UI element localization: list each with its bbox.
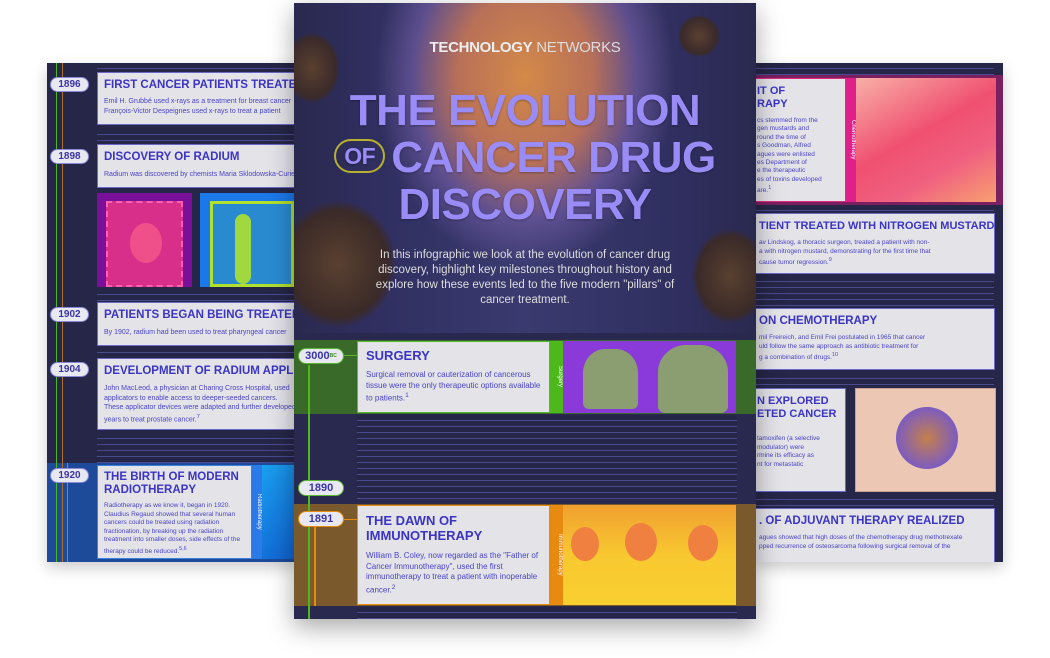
title: OF <box>344 143 375 169</box>
card: adjuvant therapy: agues showed that high doses of the chemotherapy drug methotrexate <box>759 534 962 541</box>
card: birth of chemotherapy: cs stemmed from the <box>757 117 818 124</box>
image: coley photo <box>563 505 736 605</box>
title: THE EVOLUTION <box>350 86 700 135</box>
band: immunotherapy: Immunotherapy <box>557 534 563 576</box>
card: birth of modern radiotherapy <box>97 465 252 559</box>
card: birth of chemotherapy: round the time of <box>757 134 806 141</box>
image: chemo hands <box>856 78 996 202</box>
1920 pill <box>50 468 89 483</box>
card: adjuvant therapy: . OF ADJUVANT THERAPY REALIZED <box>759 515 965 527</box>
panel: left page <box>47 63 297 562</box>
1898 pill <box>50 149 89 164</box>
1891 pill: 1891 <box>309 512 333 524</box>
card: tamoxifen <box>754 388 846 492</box>
card: birth of chemotherapy <box>754 78 846 202</box>
card: surgery <box>357 341 550 413</box>
card: discovery of radium: Radium was discovered by chemists Maria Sklodowska-Curie <box>104 171 295 178</box>
image: blue stamp <box>200 193 300 287</box>
card: patients began being treated <box>97 302 307 346</box>
card: first patient treated with nitrogen mustard: cause tumor regression.9 <box>759 257 832 266</box>
band: surgery: Surgery <box>557 366 563 388</box>
card: surgery: SURGERY <box>366 348 430 363</box>
title: DISCOVERY <box>398 180 652 229</box>
3000 BC pill: BC <box>330 352 337 358</box>
band: surgery <box>294 340 756 414</box>
card: birth of chemotherapy: agues were enlisted <box>757 151 815 158</box>
card: first patient treated with nitrogen mustard: a with nitrogen mustard, demonstrating for the first time that <box>759 248 931 255</box>
card: birth of chemotherapy: gen mustards and <box>757 125 809 132</box>
card: first cancer patients treated: François-Victor Despeignes used x-rays to treat a patient <box>104 108 281 114</box>
card: tamoxifen: ETED CANCER <box>757 408 836 420</box>
card: patients began being treated: By 1902, radium had been used to treat pharyngeal cancer <box>104 329 287 336</box>
card: tamoxifen: nt for metastatic <box>757 461 803 468</box>
card: birth of chemotherapy: es of toxins developed <box>757 176 822 183</box>
card: birth of chemotherapy: IT OF <box>757 85 785 97</box>
1896 pill <box>50 77 89 92</box>
1896 pill: 1896 <box>58 78 81 90</box>
card: birth of modern radiotherapy: Radiotherapy as we know it, began in 1920. Claudius Regaud showed that several human cancers could be treated using radiation fractionation, by breaking up the radiation treatment into smaller doses, side effects of the therapy could be reduced.5,6 <box>104 502 240 555</box>
card: first patient treated with nitrogen mustard: TIENT TREATED WITH NITROGEN MUSTARD <box>759 220 994 232</box>
card: birth of chemotherapy: s Goodman, Alfred <box>757 142 811 149</box>
card: development of radium applicators: John MacLeod, a physician at Charing Cross Hospital, used <box>104 385 290 392</box>
panel: center page <box>294 3 756 619</box>
card: discovery of radium: DISCOVERY OF RADIUM <box>104 151 239 163</box>
logo: TECHNOLOGY NETWORKS <box>430 39 620 56</box>
image: surgery engraving <box>563 341 736 413</box>
card: tamoxifen: modulator) were <box>757 444 804 451</box>
3000 BC pill: 3000 <box>305 350 330 362</box>
1890 pill <box>298 480 344 496</box>
card: adjuvant therapy: pped recurrence of osteosarcoma following surgical removal of the <box>759 543 950 550</box>
card: adjuvant therapy <box>754 508 995 568</box>
1890 pill: 1890 <box>309 482 333 494</box>
image: molecule <box>855 388 996 492</box>
1904 pill <box>50 362 89 377</box>
card: first cancer patients treated: Emil H. Grubbé used x-rays as a treatment for breast cancer <box>104 98 291 105</box>
card: birth of chemotherapy: RAPY <box>757 98 788 110</box>
1904 pill: 1904 <box>58 364 81 374</box>
card: dawn of immunotherapy: William B. Coley, now regarded as the "Father of Cancer Immunotherapy", used the first immunotherapy to treat a patient with inoperable cancer.2 <box>366 551 538 594</box>
title: CANCER DRUG <box>391 133 716 182</box>
card: first cancer patients treated <box>97 72 307 125</box>
1898 pill: 1898 <box>58 150 81 162</box>
card: first patient treated with nitrogen mustard: av Lindskog, a thoracic surgeon, treated a patient with non- <box>759 239 930 246</box>
card: surgery: Surgical removal or cauterization of cancerous tissue were the only therapeutic options available to patients.1 <box>366 370 540 403</box>
card: combination chemotherapy: ON CHEMOTHERAPY <box>759 315 877 327</box>
card: dawn of immunotherapy <box>357 505 550 605</box>
band: 1920 radiotherapy <box>47 463 297 562</box>
card: combination chemotherapy: uld follow the same approach as antibiotic treatment for <box>759 343 918 350</box>
card: development of radium applicators: years to treat prostate cancer.7 <box>104 414 200 423</box>
card: combination chemotherapy: g a combination of drugs.10 <box>759 352 838 361</box>
icon: cancer cells <box>294 15 756 326</box>
card: first patient treated with nitrogen mustard <box>754 213 995 274</box>
card: combination chemotherapy: mil Freireich, and Emil Frei postulated in 1965 that cancer <box>759 334 925 341</box>
card: dawn of immunotherapy: THE DAWN OF IMMUNOTHERAPY <box>366 513 482 543</box>
image: pink stamp <box>97 193 192 287</box>
card: discovery of radium <box>97 144 307 188</box>
card: birth of chemotherapy: e the therapeutic <box>757 167 805 174</box>
1920 pill: 1920 <box>58 470 81 480</box>
card: tamoxifen: rmine its efficacy as <box>757 452 814 459</box>
card: combination chemotherapy <box>754 308 995 370</box>
title <box>334 86 716 229</box>
card: development of radium applicators: applicators to enable access to deeper-seeded cancers. <box>104 394 278 402</box>
subtitle: In this infographic we look at the evolution of cancer drug discovery, highlight key milestones throughout history and explore how these events led to the five modern "pillars" of cancer treatment. <box>376 249 674 306</box>
panel: right page <box>754 63 1003 562</box>
band: 1920 radiotherapy: Radiotherapy <box>256 494 262 530</box>
band: chemotherapy: Chemotherapy <box>850 120 856 160</box>
card: development of radium applicators: These applicator devices were adapted and further developed <box>104 404 296 411</box>
1902 pill <box>50 307 89 322</box>
card: development of radium applicators <box>97 358 307 430</box>
card: birth of modern radiotherapy: THE BIRTH OF MODERN RADIOTHERAPY <box>104 471 239 496</box>
1902 pill: 1902 <box>58 308 81 320</box>
card: tamoxifen: N EXPLORED <box>757 395 829 407</box>
1891 pill <box>298 511 344 527</box>
3000 BC pill <box>298 348 344 364</box>
card: birth of chemotherapy: are.1 <box>757 185 771 194</box>
card: tamoxifen: tamoxifen (a selective <box>757 435 820 442</box>
band: immunotherapy <box>294 504 756 606</box>
card: birth of chemotherapy: es Department of <box>757 159 807 166</box>
band: chemotherapy <box>754 75 1003 205</box>
